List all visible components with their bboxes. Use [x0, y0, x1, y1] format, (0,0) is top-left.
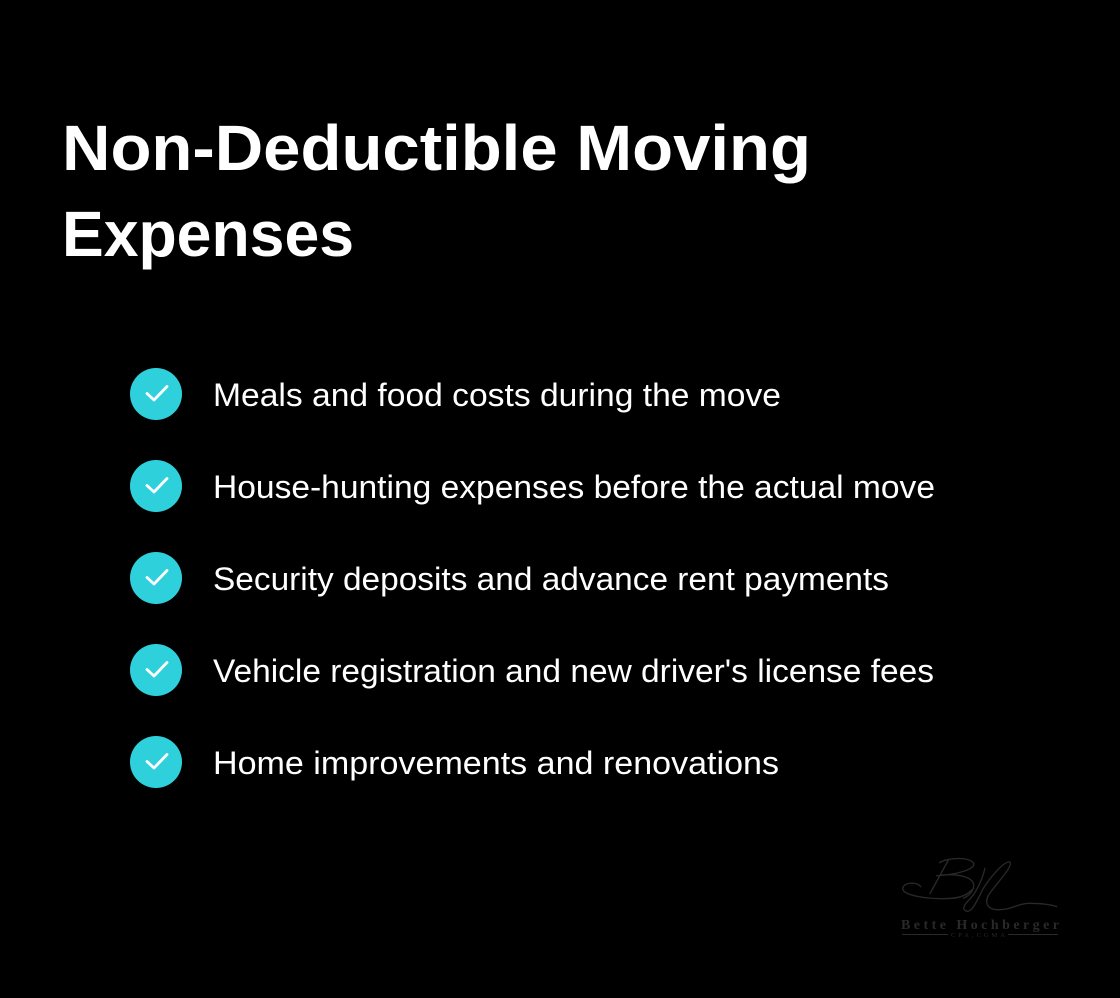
title: Non-Deductible Moving [62, 112, 811, 184]
title [62, 112, 811, 270]
item: deposits [130, 552, 889, 604]
item: deposits: Security deposits and advance rent payments [213, 561, 889, 597]
item: home improvements [130, 736, 779, 788]
item: house-hunting: House-hunting expenses before the actual move [213, 469, 935, 505]
logo: Bette Hochberger signature [901, 858, 1059, 939]
checklist [130, 368, 935, 788]
item: house-hunting [130, 460, 935, 512]
item: vehicle: Vehicle registration and new driver's license fees [213, 653, 934, 689]
logo: Bette Hochberger signature: CPA,CGMA [951, 932, 1005, 939]
title: Expenses [62, 198, 354, 270]
item: meals [130, 368, 781, 420]
logo: Bette Hochberger signature: Bette Hochberger [901, 918, 1059, 933]
item: meals: Meals and food costs during the move [213, 377, 781, 413]
item: vehicle [130, 644, 934, 696]
item: home improvements: Home improvements and renovations [213, 745, 779, 781]
